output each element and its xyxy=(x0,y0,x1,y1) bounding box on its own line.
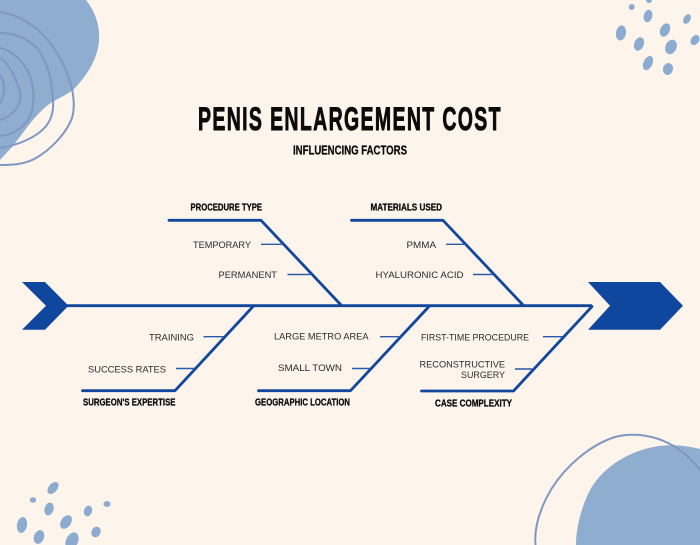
branch: case complexity: FIRST-TIME PROCEDURE xyxy=(421,332,529,344)
branch: materials used: HYALURONIC ACID xyxy=(376,270,464,281)
icon: arrow head xyxy=(588,282,683,330)
title: PENIS ENLARGEMENT COST xyxy=(198,101,502,137)
fishbone spine xyxy=(22,282,683,330)
branch: surgeon's expertise: SURGEON'S EXPERTISE xyxy=(83,397,176,409)
icon: tail chevron xyxy=(22,282,68,330)
branch: materials used: PMMA xyxy=(406,240,437,251)
branch: procedure type: PERMANENT xyxy=(218,270,277,281)
branch: geographic location: LARGE METRO AREA xyxy=(274,332,369,343)
branch: procedure type: PROCEDURE TYPE xyxy=(190,202,262,214)
decorative dots: top right xyxy=(615,0,700,76)
branch: geographic location: GEOGRAPHIC LOCATION xyxy=(255,397,350,409)
branch: geographic location xyxy=(255,306,429,409)
branch: procedure type xyxy=(169,202,341,305)
branch: procedure type: TEMPORARY xyxy=(193,240,252,251)
branch: geographic location: SMALL TOWN xyxy=(278,363,342,374)
decorative dots: bottom left xyxy=(16,480,111,545)
subtitle: INFLUENCING FACTORS xyxy=(293,142,407,157)
branch: materials used xyxy=(352,202,523,305)
branch: materials used: MATERIALS USED xyxy=(370,202,442,214)
branch: case complexity: SURGERY xyxy=(461,370,506,381)
branch: case complexity: CASE COMPLEXITY xyxy=(435,397,512,409)
branch: case complexity: RECONSTRUCTIVE xyxy=(420,359,505,370)
decorative blob: bottom right xyxy=(535,435,700,545)
branch: surgeon's expertise xyxy=(82,306,253,409)
branch: case complexity xyxy=(420,306,592,409)
branch: surgeon's expertise: SUCCESS RATES xyxy=(88,364,166,375)
branch: surgeon's expertise: TRAINING xyxy=(149,332,194,344)
decorative blob: top left xyxy=(0,0,99,165)
